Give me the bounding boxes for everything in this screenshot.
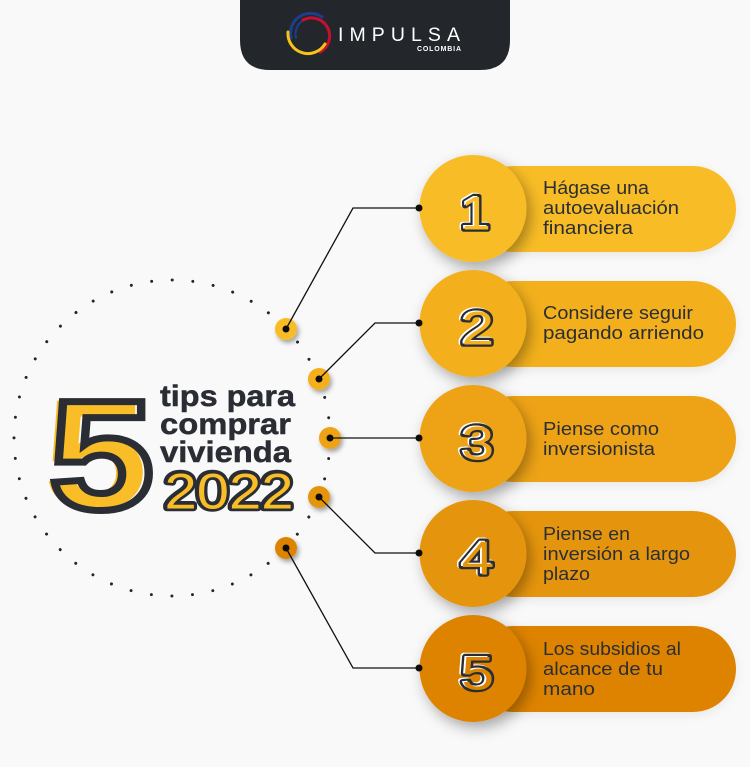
tip 5: [416, 615, 736, 722]
number 3: 3: [461, 417, 493, 470]
number 1: 1: [459, 185, 489, 238]
year 2022: 2022: [164, 463, 293, 519]
tip 1: [416, 155, 736, 262]
number 3: 3: [462, 418, 494, 470]
text 2: Considere seguir: [543, 302, 693, 323]
connector nodes: [275, 318, 341, 559]
text 4: [543, 523, 690, 584]
title text: vivienda: [160, 436, 291, 469]
tip 3: [416, 385, 736, 492]
number 4: 4: [459, 531, 492, 583]
big number 5: 5: [49, 368, 154, 542]
logo subtitle: COLOMBIA: [417, 46, 461, 53]
text 2: pagando arriendo: [543, 322, 704, 343]
text 3: [543, 418, 659, 459]
text 3: inversionista: [543, 438, 656, 459]
text 5: Los subsidios al: [543, 638, 681, 659]
dotted circle: [14, 280, 330, 596]
text 1: Hágase una: [543, 177, 650, 198]
text 4: inversión a largo: [543, 543, 690, 564]
text 1: autoevaluación: [543, 197, 679, 218]
tip 4: [416, 500, 736, 607]
header logo tab: [240, 0, 510, 70]
number 1: 1: [461, 187, 491, 240]
number 4: 4: [460, 532, 492, 584]
text 4: Piense en: [543, 523, 630, 544]
number 3: 3: [459, 416, 492, 468]
text 2: [543, 302, 704, 343]
number 2: 2: [462, 303, 494, 355]
number 2: 2: [459, 301, 492, 353]
text 1: [543, 177, 679, 238]
text 4: plazo: [543, 563, 590, 584]
number 5: 5: [461, 647, 493, 700]
number 5: 5: [459, 646, 492, 698]
text 3: Piense como: [543, 418, 659, 439]
text 5: alcance de tu: [543, 658, 663, 679]
icon: logo rings: [288, 13, 330, 54]
title text: comprar: [160, 408, 291, 441]
number 4: 4: [461, 532, 493, 585]
number 3: 3: [460, 417, 492, 469]
number 1: 1: [460, 186, 490, 239]
text 5: mano: [543, 678, 595, 699]
logo wordmark: IMPULSA: [338, 24, 460, 46]
title text: [160, 380, 295, 520]
year 2022: 2022: [164, 464, 294, 520]
tip 2: [416, 270, 736, 377]
title text: tips para: [160, 380, 295, 413]
number 1: 1: [459, 186, 489, 239]
big number 5: 5: [43, 367, 148, 541]
number 5: 5: [460, 647, 492, 699]
number 5: 5: [462, 648, 494, 700]
text 1: financiera: [543, 217, 634, 238]
number 2: 2: [461, 302, 493, 355]
text 5: [543, 638, 681, 699]
connector lines: [286, 208, 419, 668]
number 4: 4: [462, 533, 494, 585]
number 2: 2: [460, 302, 492, 354]
